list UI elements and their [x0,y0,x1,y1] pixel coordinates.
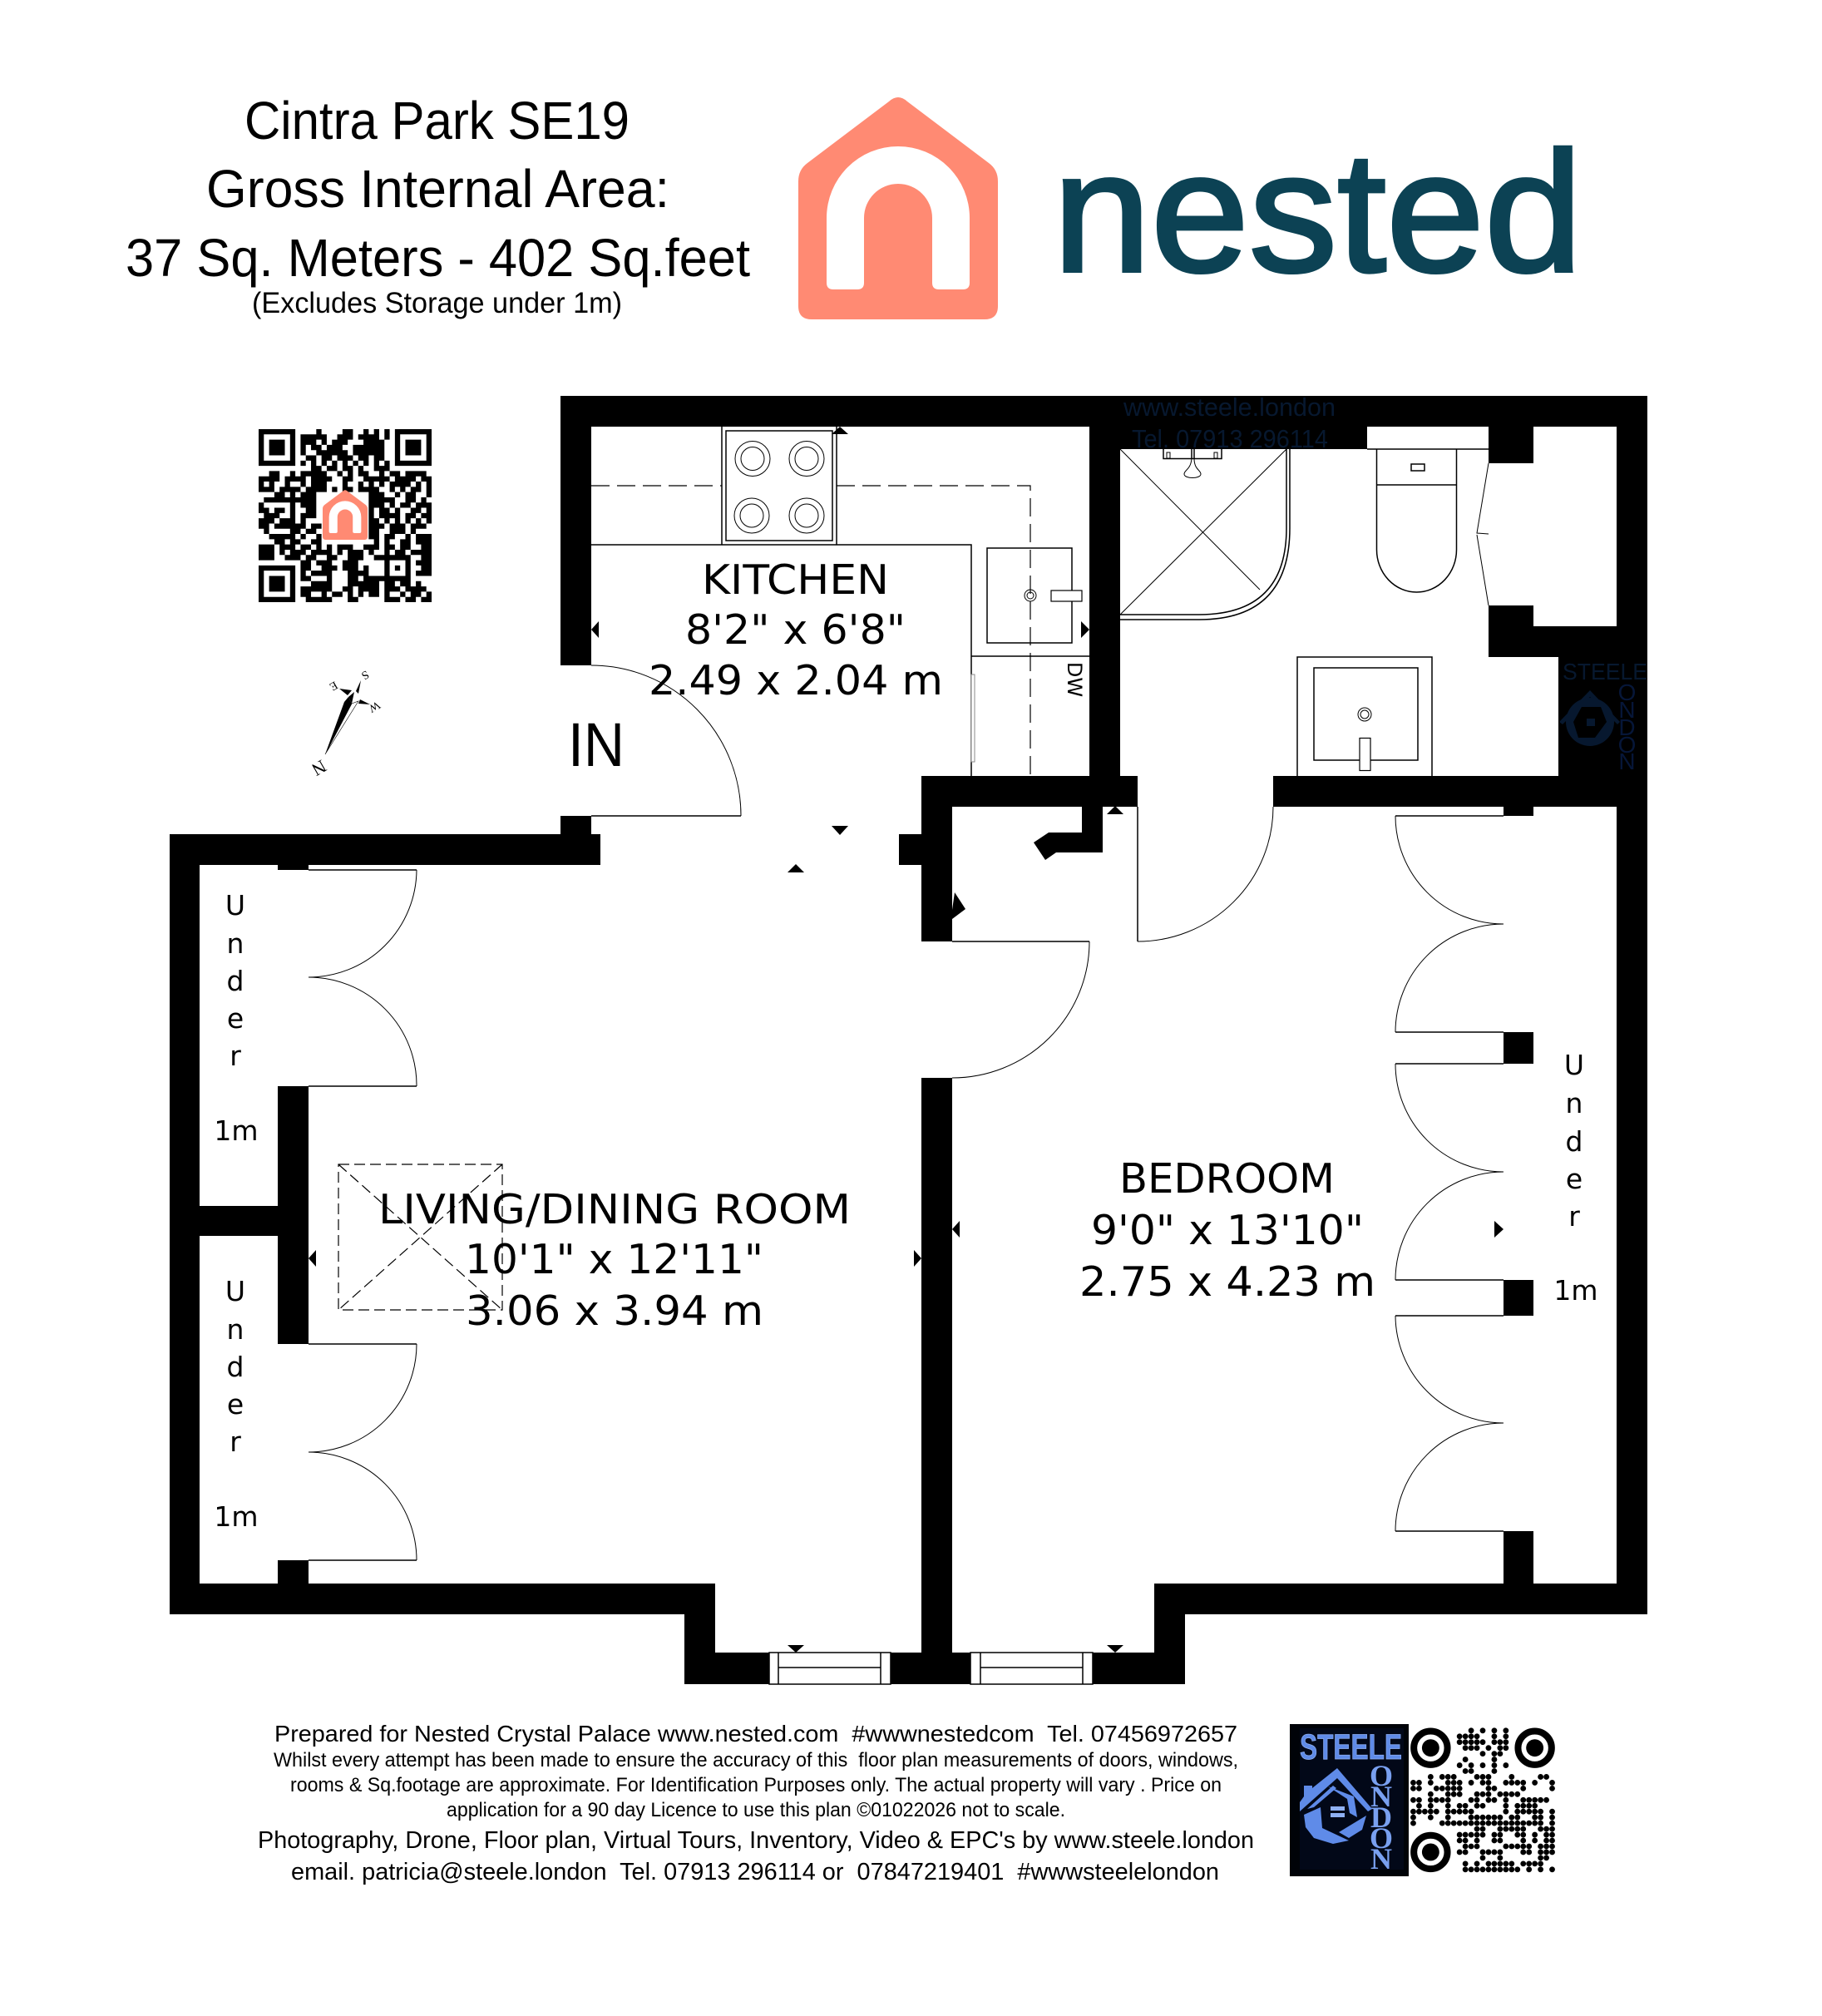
label: under 1m upper left: n [227,927,244,960]
label: under 1m lower left: U [225,1275,245,1307]
title block: Gross Internal Area: [206,159,669,219]
label: under 1m right: 1m [1553,1274,1598,1307]
label: under 1m lower left [214,1275,259,1533]
label: bedroom: BEDROOM [1119,1155,1335,1203]
label: under 1m lower left: n [227,1313,244,1346]
door arcs [591,665,1273,1078]
label: living/dining room: 10'1" x 12'11" [465,1236,763,1283]
compass: N [309,756,330,780]
label: under 1m right: U [1564,1049,1584,1081]
label: under 1m lower left: r [230,1426,241,1458]
compass: E [327,678,339,693]
Steele London logo: N [1370,1780,1392,1813]
label: under 1m right: e [1566,1163,1583,1195]
dimension marker triangles [309,427,1504,1653]
Steele London logo: STEELE [1300,1727,1402,1767]
label: living/dining room: 3.06 x 3.94 m [466,1287,763,1335]
label: under 1m upper left: d [227,965,244,997]
compass: W [366,698,382,714]
watermark on wall: O [1618,732,1636,758]
dishwasher label: DW [1063,662,1086,697]
label: under 1m right: r [1568,1200,1580,1233]
watermark on wall: N [1618,749,1636,774]
label: under 1m right: d [1566,1125,1583,1158]
Steele London logo: D [1370,1801,1392,1834]
compass: S [359,668,371,681]
bathroom cupboard door [1477,463,1489,605]
living room storage doors [309,870,417,1560]
Steele London logo: N [1370,1842,1392,1875]
title block [126,91,750,319]
label: under 1m lower left: 1m [214,1500,259,1533]
Steele London logo [1290,1724,1409,1876]
hob burners [734,441,824,533]
windows [769,1653,1093,1684]
label: kitchen: 8'2" x 6'8" [685,606,906,654]
label: entrance: IN [568,710,625,779]
toilet [1367,449,1489,592]
label: kitchen [649,556,943,704]
basin [1297,657,1432,776]
watermark on wall: Tel. 07913 296114 [1132,424,1328,453]
title block: Cintra Park SE19 [244,91,630,151]
kitchen fittings [591,427,1089,776]
label: living/dining room: LIVING/DINING ROOM [378,1186,851,1233]
icon: house in QR code [323,490,368,540]
watermark on wall [1123,393,1647,774]
label: bedroom: 2.75 x 4.23 m [1079,1258,1375,1306]
skylight [338,1164,502,1310]
floor plan [170,393,1647,1684]
Steele London logo: O [1370,1821,1393,1855]
watermark on wall: O [1618,679,1636,705]
bedroom storage doors [1395,816,1504,1531]
title block: (Excludes Storage under 1m) [252,287,622,319]
label: under 1m upper left: 1m [214,1114,259,1147]
label: under 1m lower left: e [227,1388,244,1421]
footer text: Prepared for Nested Crystal Palace www.nested.com #wwwnestedcom Tel. 07456972657 [274,1721,1237,1747]
watermark on wall: STEELE [1563,659,1647,684]
shower [1120,449,1290,620]
kitchen sink [987,548,1082,643]
label: under 1m right [1553,1049,1598,1307]
label: under 1m upper left: e [227,1002,244,1035]
QR finder rings [1414,1731,1552,1869]
house emblem [1300,1768,1372,1844]
QR code: nested [259,429,432,602]
walls [170,396,1647,1684]
label: under 1m lower left: d [227,1351,244,1383]
label: kitchen: KITCHEN [702,556,889,604]
label: bedroom: 9'0" x 13'10" [1091,1207,1364,1254]
icon: nested house logo [798,97,998,319]
label: under 1m upper left [214,889,259,1147]
compass [309,668,382,780]
watermark house emblem [1559,690,1620,746]
label: bedroom [1079,1155,1375,1306]
footer text: Whilst every attempt has been made to ensure the accuracy of this floor plan measurements of doors, windows, [274,1749,1238,1771]
label: kitchen: 2.49 x 2.04 m [649,657,943,704]
title block: 37 Sq. Meters - 402 Sq.feet [126,228,750,288]
watermark on wall: D [1618,714,1636,740]
nested wordmark: nested [1053,116,1583,308]
label: under 1m upper left: U [225,889,245,922]
QR code: Steele [1413,1731,1553,1870]
label: under 1m upper left: r [230,1040,241,1072]
watermark on wall: N [1618,697,1636,723]
footer text: email. patricia@steele.london Tel. 07913 296114 or 07847219401 #wwwsteelelondon [291,1859,1219,1885]
label: under 1m right: n [1566,1087,1583,1119]
label: living/dining room [378,1186,851,1335]
Steele London logo: O [1370,1759,1393,1792]
footer text: application for a 90 day Licence to use this plan ©01022026 not to scale. [447,1799,1065,1821]
footer text: rooms & Sq.footage are approximate. For Identification Purposes only. The actual property will vary . Price on [290,1774,1222,1796]
QR dots [1413,1731,1553,1870]
watermark on wall: www.steele.london [1123,393,1336,422]
footer text [258,1721,1254,1885]
footer text: Photography, Drone, Floor plan, Virtual Tours, Inventory, Video & EPC's by www.steele.london [258,1827,1254,1854]
